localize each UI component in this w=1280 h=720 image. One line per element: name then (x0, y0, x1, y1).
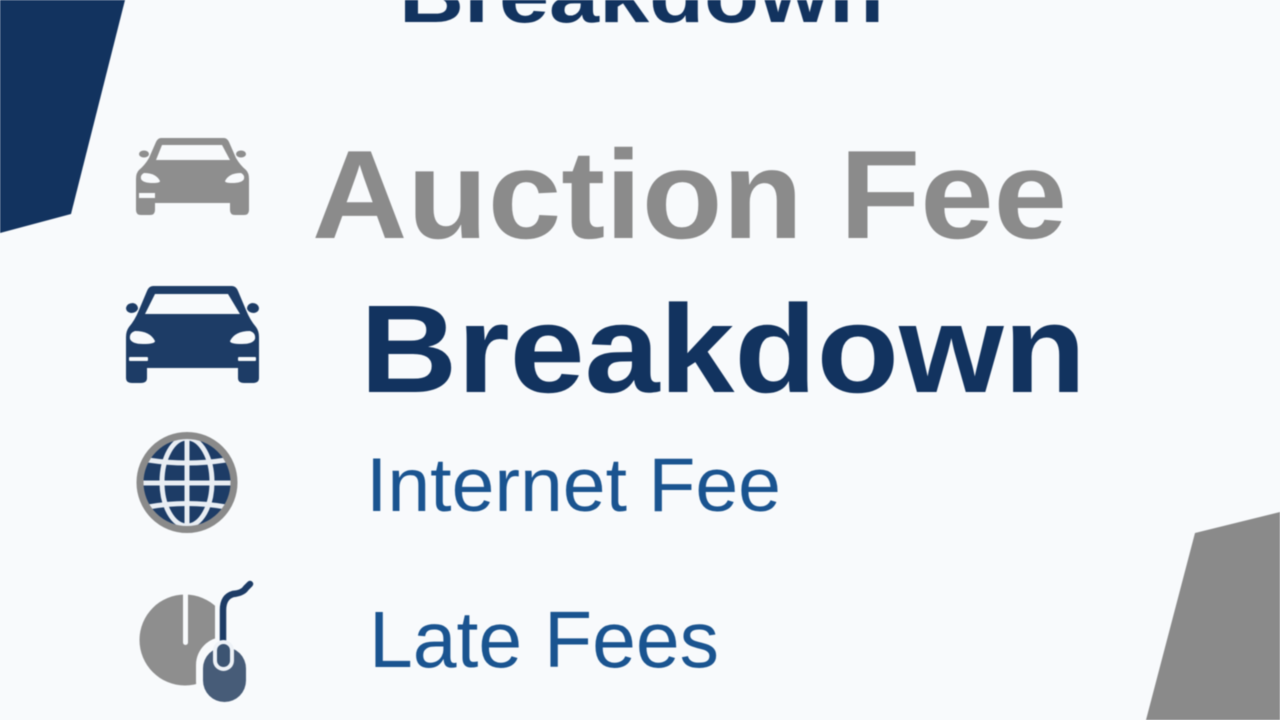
corner shape: top-left navy (0, 0, 125, 233)
text: Internet Fee: Internet Fee (366, 443, 781, 528)
icon: pie chart and mouse (140, 584, 253, 709)
corner shape: bottom-right gray (1146, 512, 1280, 720)
icon: globe (140, 436, 234, 530)
heading: Auction Fee: Auction Fee (312, 124, 1067, 265)
icon: navy car (126, 286, 259, 383)
heading: Breakdown: Breakdown (360, 280, 1086, 419)
icon: gray car (136, 138, 249, 215)
text: Late Fees: Late Fees (369, 595, 719, 684)
